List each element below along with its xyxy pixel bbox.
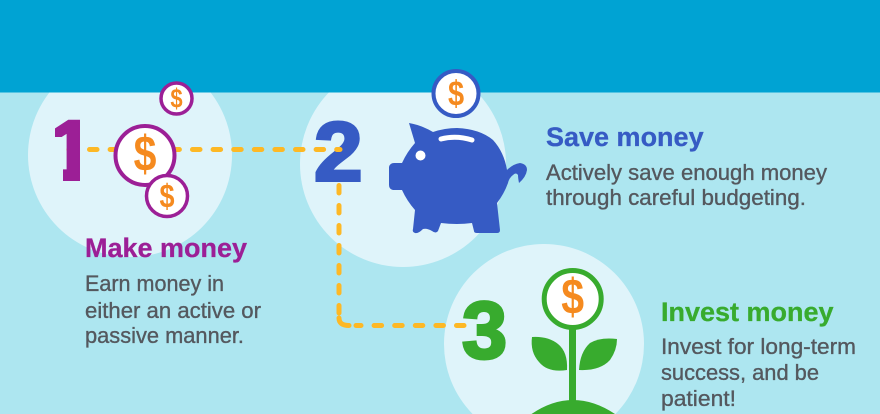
text: make money description: either an active or <box>85 298 261 323</box>
text: invest money description: success, and be <box>661 360 819 385</box>
icon: three coins <box>116 83 192 216</box>
icon: piggy bank with coin <box>389 71 527 233</box>
dashed connector arrow <box>69 150 464 326</box>
text: make money description: passive manner. <box>85 323 244 348</box>
heading: make money: Make money <box>85 233 247 263</box>
text: invest money description <box>661 334 856 411</box>
background circle: step 1 <box>28 53 232 257</box>
icon: three coins: $ <box>170 85 183 114</box>
heading: invest money: Invest money <box>661 297 834 327</box>
text: invest money description: patient! <box>661 386 736 411</box>
heading: save money: Save money <box>546 122 704 152</box>
icon: three coins: $ <box>159 179 175 215</box>
text: invest money description: Invest for long-term <box>661 334 856 359</box>
text: save money description: Actively save enough money <box>546 160 827 185</box>
icon: money plant <box>532 269 617 414</box>
number 1: 1 <box>48 104 95 198</box>
icon: three coins: $ <box>134 126 156 182</box>
text: save money description: through careful budgeting. <box>546 185 806 210</box>
icon: money plant: $ <box>561 269 584 325</box>
background circle: step 3 <box>444 244 644 414</box>
number 2: 2 <box>314 105 363 199</box>
text: make money description <box>85 271 261 348</box>
text: save money description <box>546 160 827 210</box>
number 3: 3 <box>462 286 507 376</box>
background circle: step 2 <box>300 61 506 267</box>
top blue band <box>0 0 880 92</box>
icon: piggy bank with coin: $ <box>448 74 464 113</box>
text: make money description: Earn money in <box>85 271 224 296</box>
